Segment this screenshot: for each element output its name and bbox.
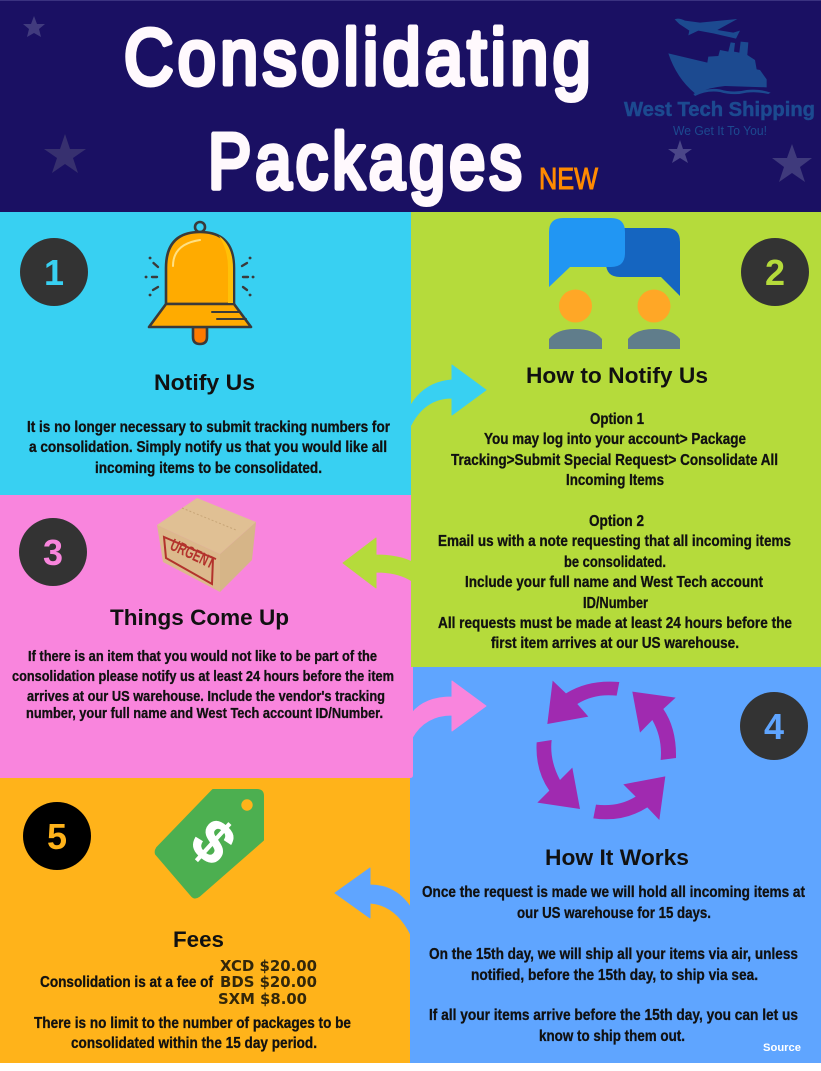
number badge 3: 3 xyxy=(43,532,63,573)
text: how it works body: notified, before the 15th day, to ship via sea. xyxy=(471,967,758,984)
icon: urgent box: URGENT xyxy=(167,535,218,573)
icon: airplane xyxy=(675,19,740,39)
text: options: be consolidated. xyxy=(564,554,666,571)
number badge 5 xyxy=(23,802,91,870)
panel: 3 things come up xyxy=(0,495,413,778)
number badge 4 xyxy=(740,692,808,760)
icon: price tag xyxy=(156,790,263,898)
text: fees note xyxy=(34,1015,351,1052)
arrow: step 4 to 5 xyxy=(335,868,411,935)
icon: price tag: $ xyxy=(179,806,248,878)
panel: 5 fees xyxy=(0,778,410,1063)
text: fee amounts: BDS $20.00 xyxy=(220,973,317,991)
heading: how to notify us: How to Notify Us xyxy=(526,363,708,388)
number badge 3 xyxy=(19,518,87,586)
title: Packages xyxy=(208,116,526,205)
number badge 2: 2 xyxy=(765,252,785,293)
logo tagline: We Get It To You! xyxy=(673,123,767,138)
text: options: ID/Number xyxy=(583,595,648,612)
text: notify us body: It is no longer necessary to submit tracking numbers for xyxy=(27,419,390,436)
text: options: Option 1 xyxy=(590,411,644,428)
text: fees note: There is no limit to the number of packages to be xyxy=(34,1015,351,1032)
arrow: step 2 to 3 xyxy=(343,538,412,588)
text: notify us body xyxy=(27,419,390,477)
decorative stars xyxy=(23,16,812,182)
text: fees note: consolidated within the 15 day period. xyxy=(71,1035,317,1052)
title: Consolidating xyxy=(124,12,595,101)
heading: things come up: Things Come Up xyxy=(110,605,289,630)
number badge 5: 5 xyxy=(47,816,67,857)
panel: 4 how it works xyxy=(410,667,821,1063)
arrow: step 3 to 4 xyxy=(412,681,486,738)
text: fee amounts xyxy=(218,957,317,1008)
icon: ship xyxy=(668,42,771,96)
number badge 2 xyxy=(741,238,809,306)
text: things come up body: arrives at our US warehouse. Include the vendor's tracking xyxy=(27,689,385,705)
text: things come up body: number, your full name and West Tech account ID/Number. xyxy=(26,706,383,722)
text: fee line: Consolidation is at a fee of xyxy=(40,974,214,991)
text: options: Tracking>Submit Special Request> Consolidate All xyxy=(451,452,778,469)
heading: how it works: How It Works xyxy=(545,845,689,870)
text: things come up body: If there is an item that you would not like to be part of the xyxy=(28,649,377,665)
text: options: first item arrives at our US warehouse. xyxy=(491,635,739,652)
icon: chat people xyxy=(549,218,680,349)
text: things come up body: consolidation please notify us at least 24 hours before the item xyxy=(12,669,394,685)
text: notify us body: incoming items to be consolidated. xyxy=(95,460,322,477)
number badge 1 xyxy=(20,238,88,306)
text: options: Include your full name and West Tech account xyxy=(465,574,763,591)
text: fee amounts: XCD $20.00 xyxy=(220,957,317,975)
text: how it works body: our US warehouse for 15 days. xyxy=(517,905,711,922)
text: things come up body xyxy=(12,649,394,722)
text: options: You may log into your account> Package xyxy=(484,431,746,448)
text: options: Incoming Items xyxy=(566,472,664,489)
icon: bell xyxy=(146,222,253,344)
title xyxy=(124,12,595,205)
icon: cycle arrows xyxy=(536,681,676,820)
number badge 4: 4 xyxy=(764,706,784,747)
text: fee amounts: SXM $8.00 xyxy=(218,990,307,1008)
number badge 1: 1 xyxy=(44,252,64,293)
heading: notify us: Notify Us xyxy=(154,370,255,395)
logo: West Tech Shipping xyxy=(624,19,815,138)
text: options xyxy=(438,411,792,652)
heading: fees: Fees xyxy=(173,927,224,952)
text: how it works body: know to ship them out. xyxy=(539,1028,685,1045)
arrow: step 1 to 2 xyxy=(411,365,486,425)
text: how it works body xyxy=(422,884,805,1045)
panel: 2 how to notify us xyxy=(411,212,821,668)
panel: header xyxy=(0,0,821,213)
icon: urgent box xyxy=(157,498,256,592)
new badge: NEW xyxy=(539,161,599,196)
text: notify us body: a consolidation. Simply notify us that you would like all xyxy=(29,439,387,456)
panel: 1 notify us xyxy=(0,212,411,496)
logo name: West Tech Shipping xyxy=(624,99,815,121)
text: options: Option 2 xyxy=(589,513,644,530)
source link: Source xyxy=(763,1042,801,1054)
